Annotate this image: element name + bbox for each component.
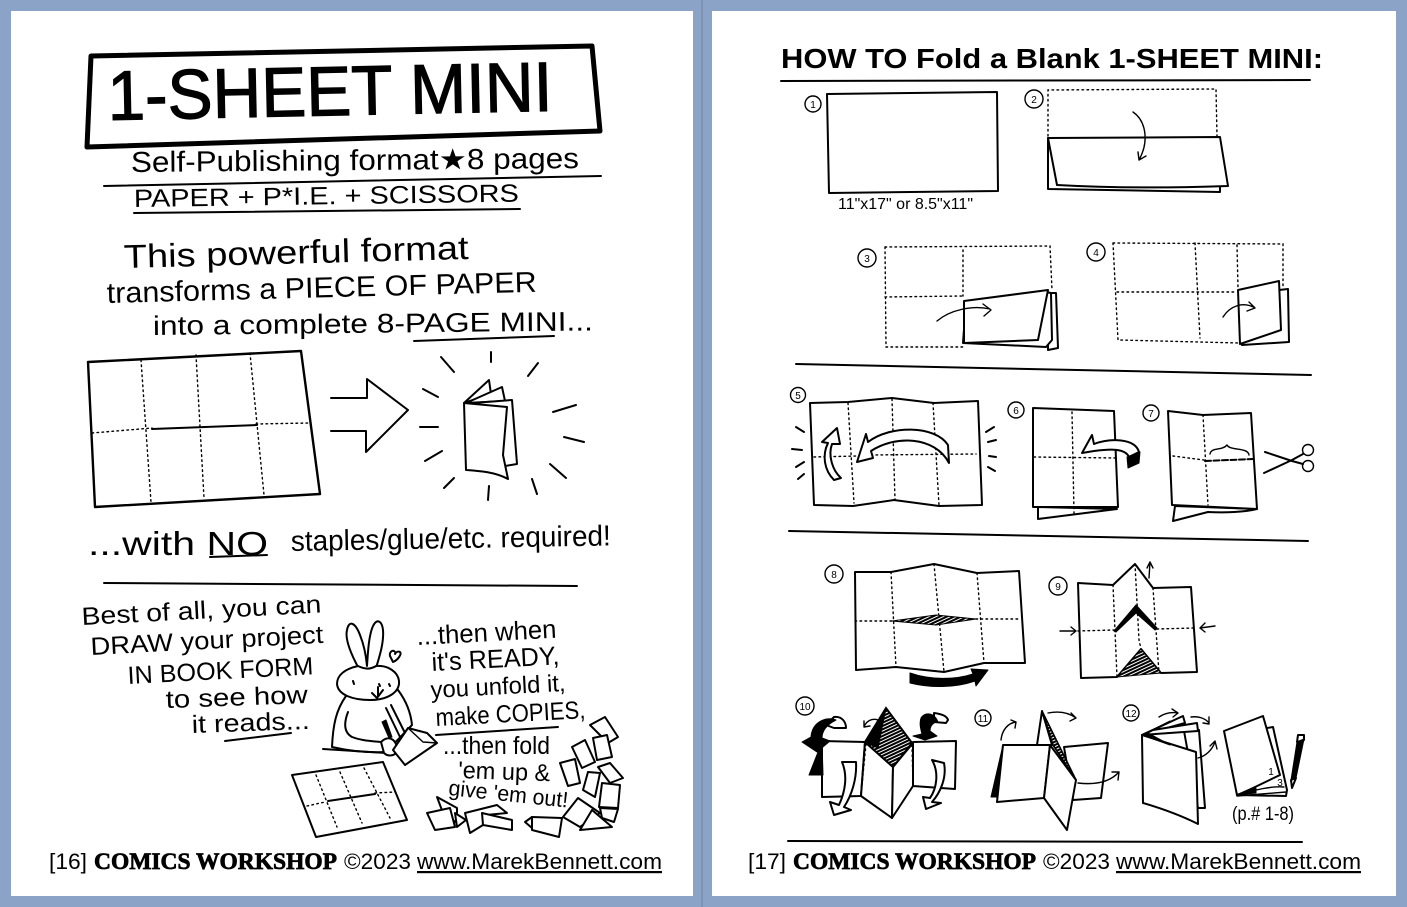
mini with page numbers and pencil: [1224, 716, 1304, 796]
step 8: [825, 564, 1025, 687]
step 6: 6: [1013, 406, 1019, 417]
panel: right page: [712, 11, 1396, 896]
mini with page numbers and pencil: 3: [1277, 778, 1283, 789]
step 1: [805, 92, 998, 213]
icon: scissors: [1264, 444, 1314, 473]
text: best of all: to see how: [165, 681, 309, 714]
step 6: [1008, 402, 1140, 519]
footer right: [748, 849, 1361, 874]
text: then when ready: ...then fold: [443, 732, 550, 760]
diagram: unfolded sheet: [88, 351, 320, 507]
step 11: [975, 710, 1119, 830]
step 10: 10: [799, 702, 811, 713]
footer left: ©2023: [344, 849, 411, 874]
icon: pencil: [1291, 735, 1304, 788]
illustration: sheet on desk: [292, 762, 407, 837]
text: then when ready: ...then when: [416, 614, 557, 651]
footer right: www.MarekBennett.com: [1115, 849, 1361, 874]
footer left: [49, 849, 662, 874]
step 7: [1143, 405, 1314, 521]
intro text: into a complete 8-PAGE MINI...: [153, 306, 593, 341]
text: then when ready: you unfold it,: [430, 670, 566, 704]
mini with page numbers and pencil: 1: [1268, 767, 1274, 778]
footer right: ©2023: [1043, 849, 1110, 874]
text: then when ready: [416, 614, 586, 813]
text: best of all: Best of all, you can: [81, 590, 322, 631]
text: no staples: ...with NO: [88, 525, 268, 562]
step 3: [858, 246, 1058, 350]
text: then when ready: it's READY,: [431, 640, 560, 677]
heading: HOW TO Fold a Blank 1-SHEET MINI:: [781, 43, 1323, 74]
step 3: 3: [864, 254, 870, 265]
text: no staples: staples/glue/etc. required!: [291, 520, 611, 558]
step 9: [1049, 562, 1215, 678]
step 2: [1025, 89, 1228, 192]
step 5: [790, 388, 996, 506]
step 12: [1123, 705, 1217, 824]
step 10: [796, 697, 956, 818]
text: best of all: [81, 590, 324, 741]
materials line: PAPER + P*I.E. + SCISSORS: [134, 180, 519, 213]
text: then when ready: 'em up &: [458, 757, 551, 787]
footer left: COMICS WORKSHOP: [94, 849, 337, 874]
text: best of all: IN BOOK FORM: [127, 652, 314, 690]
step 1: 1: [810, 100, 816, 111]
intro text: transforms a PIECE OF PAPER: [106, 267, 537, 310]
footer right: [17]: [748, 849, 786, 874]
text: then when ready: make COPIES,: [435, 696, 586, 732]
panel: left page: [11, 11, 693, 896]
step 1: 11"x17" or 8.5"x11": [838, 196, 973, 213]
step 4: [1087, 243, 1289, 345]
label: page numbers: (p.# 1-8): [1232, 804, 1294, 825]
step 8: 8: [831, 570, 837, 581]
step 11: 11: [978, 714, 989, 725]
step 9: 9: [1055, 582, 1061, 593]
text: no staples: [88, 520, 611, 562]
text: best of all: it reads...: [191, 707, 310, 739]
footer left: www.MarekBennett.com: [416, 849, 662, 874]
illustration: rabbit drawing: [323, 621, 437, 765]
footer left: [16]: [49, 849, 87, 874]
step 12: 12: [1125, 709, 1137, 720]
intro text: [106, 229, 593, 341]
title box: 1-SHEET MINI: [107, 48, 553, 135]
arrow: [331, 379, 408, 452]
text: best of all: DRAW your project: [90, 621, 324, 661]
step 5: 5: [795, 391, 801, 402]
icon: folded mini book with rays: [420, 352, 584, 500]
subtitle: Self-Publishing format★8 pages: [131, 143, 579, 179]
step 7: 7: [1148, 409, 1154, 420]
step 2: 2: [1031, 95, 1037, 106]
intro text: This powerful format: [123, 229, 469, 275]
step 4: 4: [1093, 248, 1099, 259]
footer right: COMICS WORKSHOP: [793, 849, 1036, 874]
illustration: pile of folded minis: [427, 717, 623, 837]
text: then when ready: give 'em out!: [447, 775, 569, 813]
